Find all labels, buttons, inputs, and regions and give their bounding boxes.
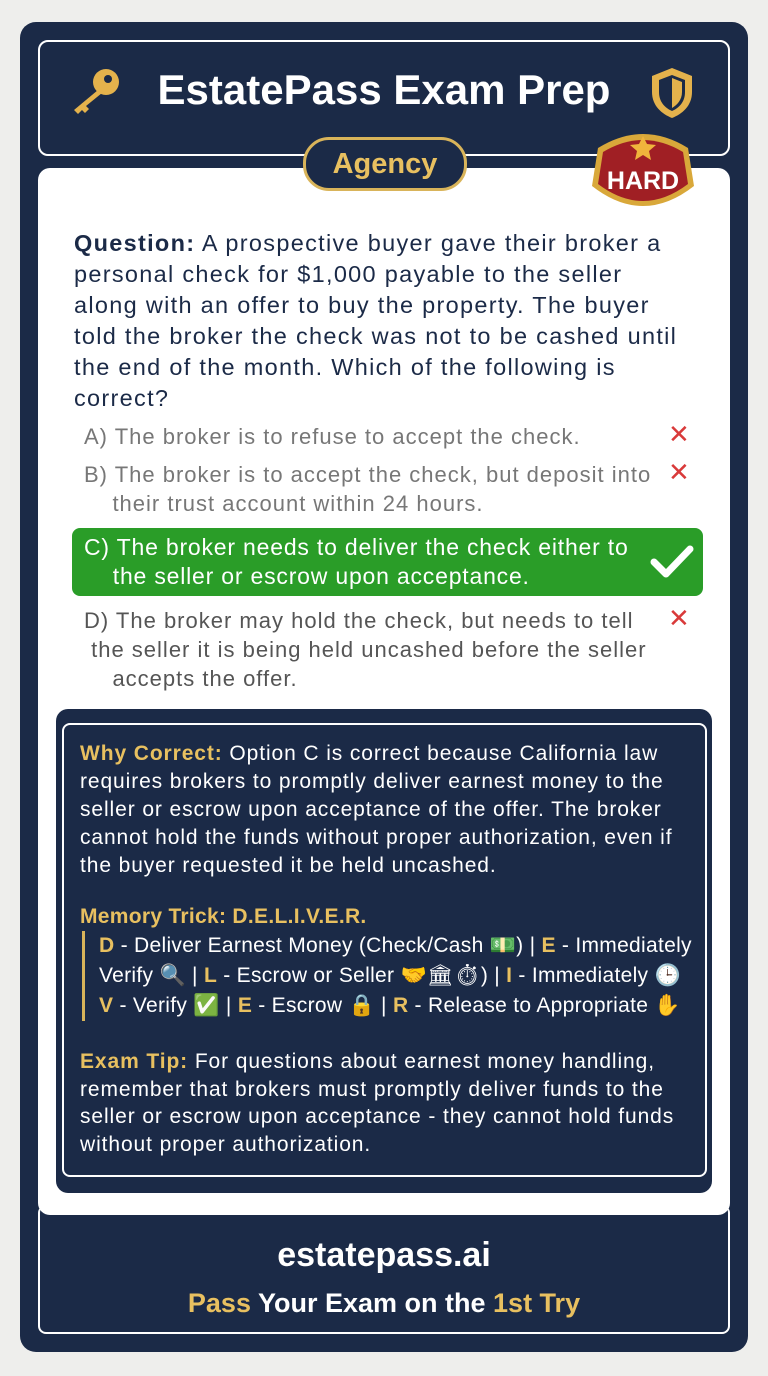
why correct: Why Correct: Option C is correct because California law <box>80 742 658 765</box>
footer tagline: Pass Your Exam on the 1st Try <box>188 1288 580 1318</box>
exam tip: without proper authorization. <box>80 1132 371 1156</box>
option B <box>84 457 691 516</box>
exam tip: Exam Tip: For questions about earnest money handling, <box>80 1050 655 1073</box>
option C correct: C) The broker needs to deliver the check either to <box>84 534 629 560</box>
memory trick: D - Deliver Earnest Money (Check/Cash 💵) | E - Immediately <box>99 934 692 957</box>
option C correct: the seller or escrow upon acceptance. <box>113 563 530 589</box>
exam tip: seller or escrow upon acceptance - they cannot hold funds <box>80 1105 674 1128</box>
badge: HARD <box>592 134 694 206</box>
question text: Question: A prospective buyer gave their broker a <box>74 230 661 256</box>
option D: the seller it is being held uncashed before the seller <box>91 637 647 662</box>
footer url: estatepass.ai <box>277 1236 491 1274</box>
icon: shield <box>652 68 692 118</box>
question text: the end of the month. Which of the following is <box>74 354 616 380</box>
question text <box>74 230 677 411</box>
why correct: requires brokers to promptly deliver earnest money to the <box>80 770 664 793</box>
option C correct <box>72 528 703 596</box>
why correct <box>80 742 672 877</box>
why correct: cannot hold the funds without proper authorization, even if <box>80 826 672 849</box>
badge: HARD: HARD <box>607 167 679 195</box>
option A <box>84 419 691 449</box>
memory trick <box>80 905 692 1021</box>
why correct: the buyer requested it be held uncashed. <box>80 854 497 877</box>
option D: D) The broker may hold the check, but needs to tell <box>84 608 634 633</box>
explanation panel <box>56 709 712 1193</box>
option B: ✕ <box>668 457 691 487</box>
option D: ✕ <box>668 603 691 633</box>
category pill: Agency <box>333 148 437 180</box>
memory trick: Memory Trick: D.E.L.I.V.E.R. <box>80 905 367 928</box>
why correct: seller or escrow upon acceptance of the offer. The broker <box>80 798 662 821</box>
option D: accepts the offer. <box>112 666 298 691</box>
question text: told the broker the check was not to be cashed until <box>74 323 677 349</box>
exam tip: remember that brokers must promptly deliver funds to the <box>80 1078 664 1100</box>
option B: their trust account within 24 hours. <box>112 491 484 516</box>
title: EstatePass Exam Prep <box>158 66 610 113</box>
icon: key <box>74 69 119 114</box>
footer box <box>38 1205 730 1334</box>
option B: B) The broker is to accept the check, but deposit into <box>84 462 651 487</box>
memory trick: Verify 🔍 | L - Escrow or Seller 🤝🏛⏱) | I - Immediately 🕒 <box>99 964 681 987</box>
option A: ✕ <box>668 419 691 449</box>
exam tip <box>80 1050 674 1156</box>
option D <box>84 603 691 691</box>
icon: check <box>650 546 694 578</box>
category pill <box>303 137 467 191</box>
question text: along with an offer to buy the property. The buyer <box>74 292 650 318</box>
header box <box>38 40 730 156</box>
option A: A) The broker is to refuse to accept the check. <box>84 424 581 449</box>
memory trick: V - Verify ✅ | E - Escrow 🔒 | R - Release to Appropriate ✋ <box>99 994 681 1017</box>
question text: correct? <box>74 385 169 411</box>
white panel <box>38 168 730 1215</box>
question text: personal check for $1,000 payable to the seller <box>74 261 622 287</box>
